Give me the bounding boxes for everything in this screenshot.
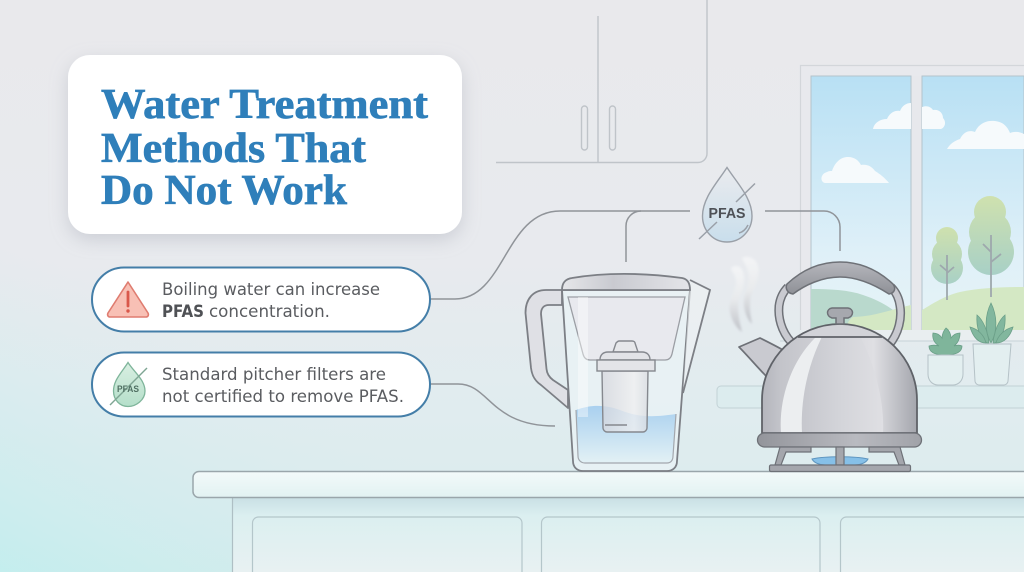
counter top: [193, 472, 1024, 498]
wall cabinet outline: [496, 0, 707, 162]
sky panes: [811, 76, 1024, 330]
window with outdoor scene: [800, 65, 1024, 341]
title text: Do Not Work: [101, 168, 348, 214]
small plant: [928, 328, 963, 385]
pitcher lid: [562, 274, 690, 290]
title text: Methods That: [101, 126, 366, 172]
kettle handle: [779, 262, 901, 345]
callout text: Standard pitcher filters are: [162, 365, 386, 385]
clouds: [821, 103, 1024, 183]
callout text: not certified to remove PFAS.: [162, 387, 404, 407]
icon: warning triangle: [108, 282, 148, 317]
pitcher handle: [526, 290, 568, 408]
icon: PFAS drop with slash: [699, 168, 755, 242]
kettle spout: [739, 338, 783, 377]
callout: pitcher filters: [92, 352, 430, 416]
steam: [730, 257, 758, 332]
kettle on stove: [739, 262, 922, 472]
inner base line: [576, 410, 676, 463]
filter cartridge: [597, 341, 655, 432]
burner grate: [770, 447, 910, 472]
window mullion: [912, 76, 922, 330]
water pitcher: [526, 274, 710, 471]
callout text: PFAS: [162, 302, 204, 322]
hills: [811, 287, 1024, 330]
lid knob: [828, 308, 852, 324]
kettle body: [762, 320, 917, 433]
callout text: Boiling water can increase: [162, 280, 380, 300]
callout text: [162, 280, 380, 322]
small tree: [931, 227, 963, 300]
icon: green PFAS drop: PFAS: [117, 384, 139, 394]
light reflection: [578, 297, 588, 417]
callout: boiling water: [92, 268, 430, 332]
burner flame: [812, 457, 868, 465]
pitcher body: [562, 290, 690, 471]
connector lines: [430, 211, 840, 426]
pitcher spout: [683, 280, 710, 393]
kettle base ring: [758, 433, 922, 447]
large tree: [968, 196, 1014, 297]
callout text: concentration.: [209, 302, 330, 322]
title card: [68, 55, 462, 234]
lid line: [798, 336, 882, 338]
window sill and shelf: [717, 330, 1024, 408]
title text: Water Treatment: [101, 82, 428, 128]
icon: PFAS drop with slash: PFAS: [708, 206, 746, 222]
callout text: [162, 365, 404, 407]
reservoir: [568, 297, 685, 360]
icon: green PFAS drop: [110, 362, 147, 406]
trees: [931, 196, 1014, 300]
water fill: [576, 406, 676, 463]
base cabinet with doors: [232, 497, 1024, 572]
large plant: [970, 303, 1013, 385]
potted plants: [928, 303, 1013, 385]
